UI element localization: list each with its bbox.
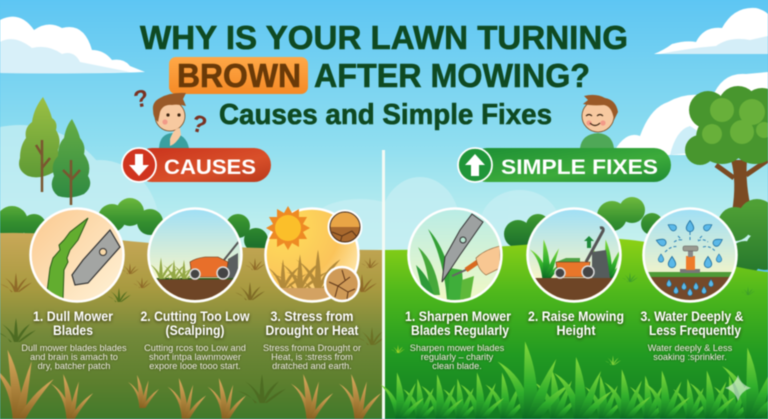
text: fix 1: regularly – charity bbox=[421, 352, 494, 362]
text: cause 3: Stress froma Drought or bbox=[263, 343, 361, 353]
panel: cutting too low bbox=[143, 208, 242, 304]
header: simple fixes: SIMPLE FIXES bbox=[501, 155, 658, 179]
ground: green lawn bbox=[385, 238, 768, 419]
header: simple fixes bbox=[458, 148, 671, 182]
text: cause 2: expore looe tooo start. bbox=[149, 361, 241, 371]
text: cause 2: (Scalping) bbox=[166, 322, 224, 338]
panel: raise mowing height bbox=[528, 208, 628, 304]
text: cause 3 bbox=[263, 308, 361, 371]
text: cause 2: 2. Cutting Too Low bbox=[140, 308, 250, 324]
title: AFTER MOWING? bbox=[314, 57, 590, 94]
small dry grass tufts bbox=[0, 257, 387, 345]
bushes: far hills bbox=[0, 197, 768, 278]
text: fix 1: Blades Regularly bbox=[411, 322, 509, 338]
icon: down arrow bbox=[129, 154, 149, 176]
cloud: top left bbox=[0, 17, 145, 73]
foreground: green grass bbox=[380, 342, 768, 419]
question marks: ? bbox=[132, 85, 151, 114]
text: fix 1 bbox=[405, 308, 511, 371]
trees: left pines bbox=[19, 97, 90, 205]
ground: brown dry lawn bbox=[0, 233, 382, 419]
text: cause 3: 3. Stress from bbox=[270, 308, 354, 324]
text: fix 2 bbox=[528, 308, 624, 338]
highlight: BROWN bbox=[169, 57, 308, 94]
icon: cracked earth bottom bbox=[325, 267, 359, 301]
sky background bbox=[0, 0, 768, 260]
text: fix 1: clean blade. bbox=[432, 361, 482, 371]
text: cause 2: Cutting rcos too Low and bbox=[144, 343, 246, 353]
text: fix 1: 1. Sharpen Mower bbox=[405, 308, 511, 324]
text: fix 3: Less Frequently bbox=[649, 322, 741, 338]
panel: dull mower blades bbox=[30, 208, 124, 302]
tree: right bbox=[685, 86, 768, 212]
title: Causes and Simple Fixes bbox=[219, 99, 552, 131]
icon: cracked earth top bbox=[329, 211, 361, 243]
text: cause 3: dratched and earth. bbox=[272, 361, 352, 371]
divider bbox=[382, 150, 385, 419]
text: fix 1: Sharpen mower blades bbox=[410, 343, 505, 353]
panel: sharpen mower blades bbox=[408, 208, 502, 302]
text: cause 1: dry, batcher patch bbox=[38, 361, 110, 371]
text: fix 3: 3. Water Deeply & bbox=[640, 308, 744, 324]
character: happy boy bbox=[580, 95, 618, 148]
text: cause 1 bbox=[21, 308, 127, 371]
text: cause 2 bbox=[140, 308, 250, 371]
panel: drought or heat bbox=[259, 206, 361, 304]
small green grass tufts bbox=[391, 272, 755, 365]
pale distant hills bbox=[0, 125, 560, 325]
text: fix 3: Water deeply & Less bbox=[648, 343, 733, 353]
icon: up arrow bbox=[465, 154, 485, 176]
icon: sun bbox=[266, 206, 310, 250]
text: cause 2: short intpa lawnmower bbox=[149, 352, 241, 362]
text: cause 1: and brain is amach to bbox=[30, 352, 118, 362]
text: fix 3 bbox=[640, 308, 744, 362]
panel: water deeply bbox=[644, 208, 736, 304]
icon: watermark sparkle bbox=[725, 375, 751, 401]
header: causes: CAUSES bbox=[164, 155, 256, 179]
character: confused boy bbox=[132, 85, 210, 148]
text: fix 2: Height bbox=[556, 322, 596, 338]
text: cause 1: Blades bbox=[53, 322, 93, 338]
title bbox=[140, 19, 628, 131]
foreground: dry grass bbox=[0, 350, 381, 419]
text: fix 3: soaking :sprinkler. bbox=[653, 352, 727, 362]
cloud: behind right tree bbox=[612, 72, 768, 155]
text: cause 1: 1. Dull Mower bbox=[33, 308, 113, 324]
icon: up arrow bbox=[584, 236, 594, 248]
character: confused boy: ? bbox=[189, 110, 210, 140]
title: BROWN bbox=[177, 57, 301, 94]
text: fix 2: 2. Raise Mowing bbox=[528, 308, 624, 324]
text: cause 1: Dull mower blades blades bbox=[21, 343, 127, 353]
cloud: top right bbox=[654, 8, 768, 54]
title: WHY IS YOUR LAWN TURNING bbox=[140, 19, 628, 56]
header: causes bbox=[122, 148, 271, 182]
text: cause 3: Heat, is :stress from bbox=[271, 352, 353, 362]
text: cause 3: Drought or Heat bbox=[266, 322, 359, 338]
